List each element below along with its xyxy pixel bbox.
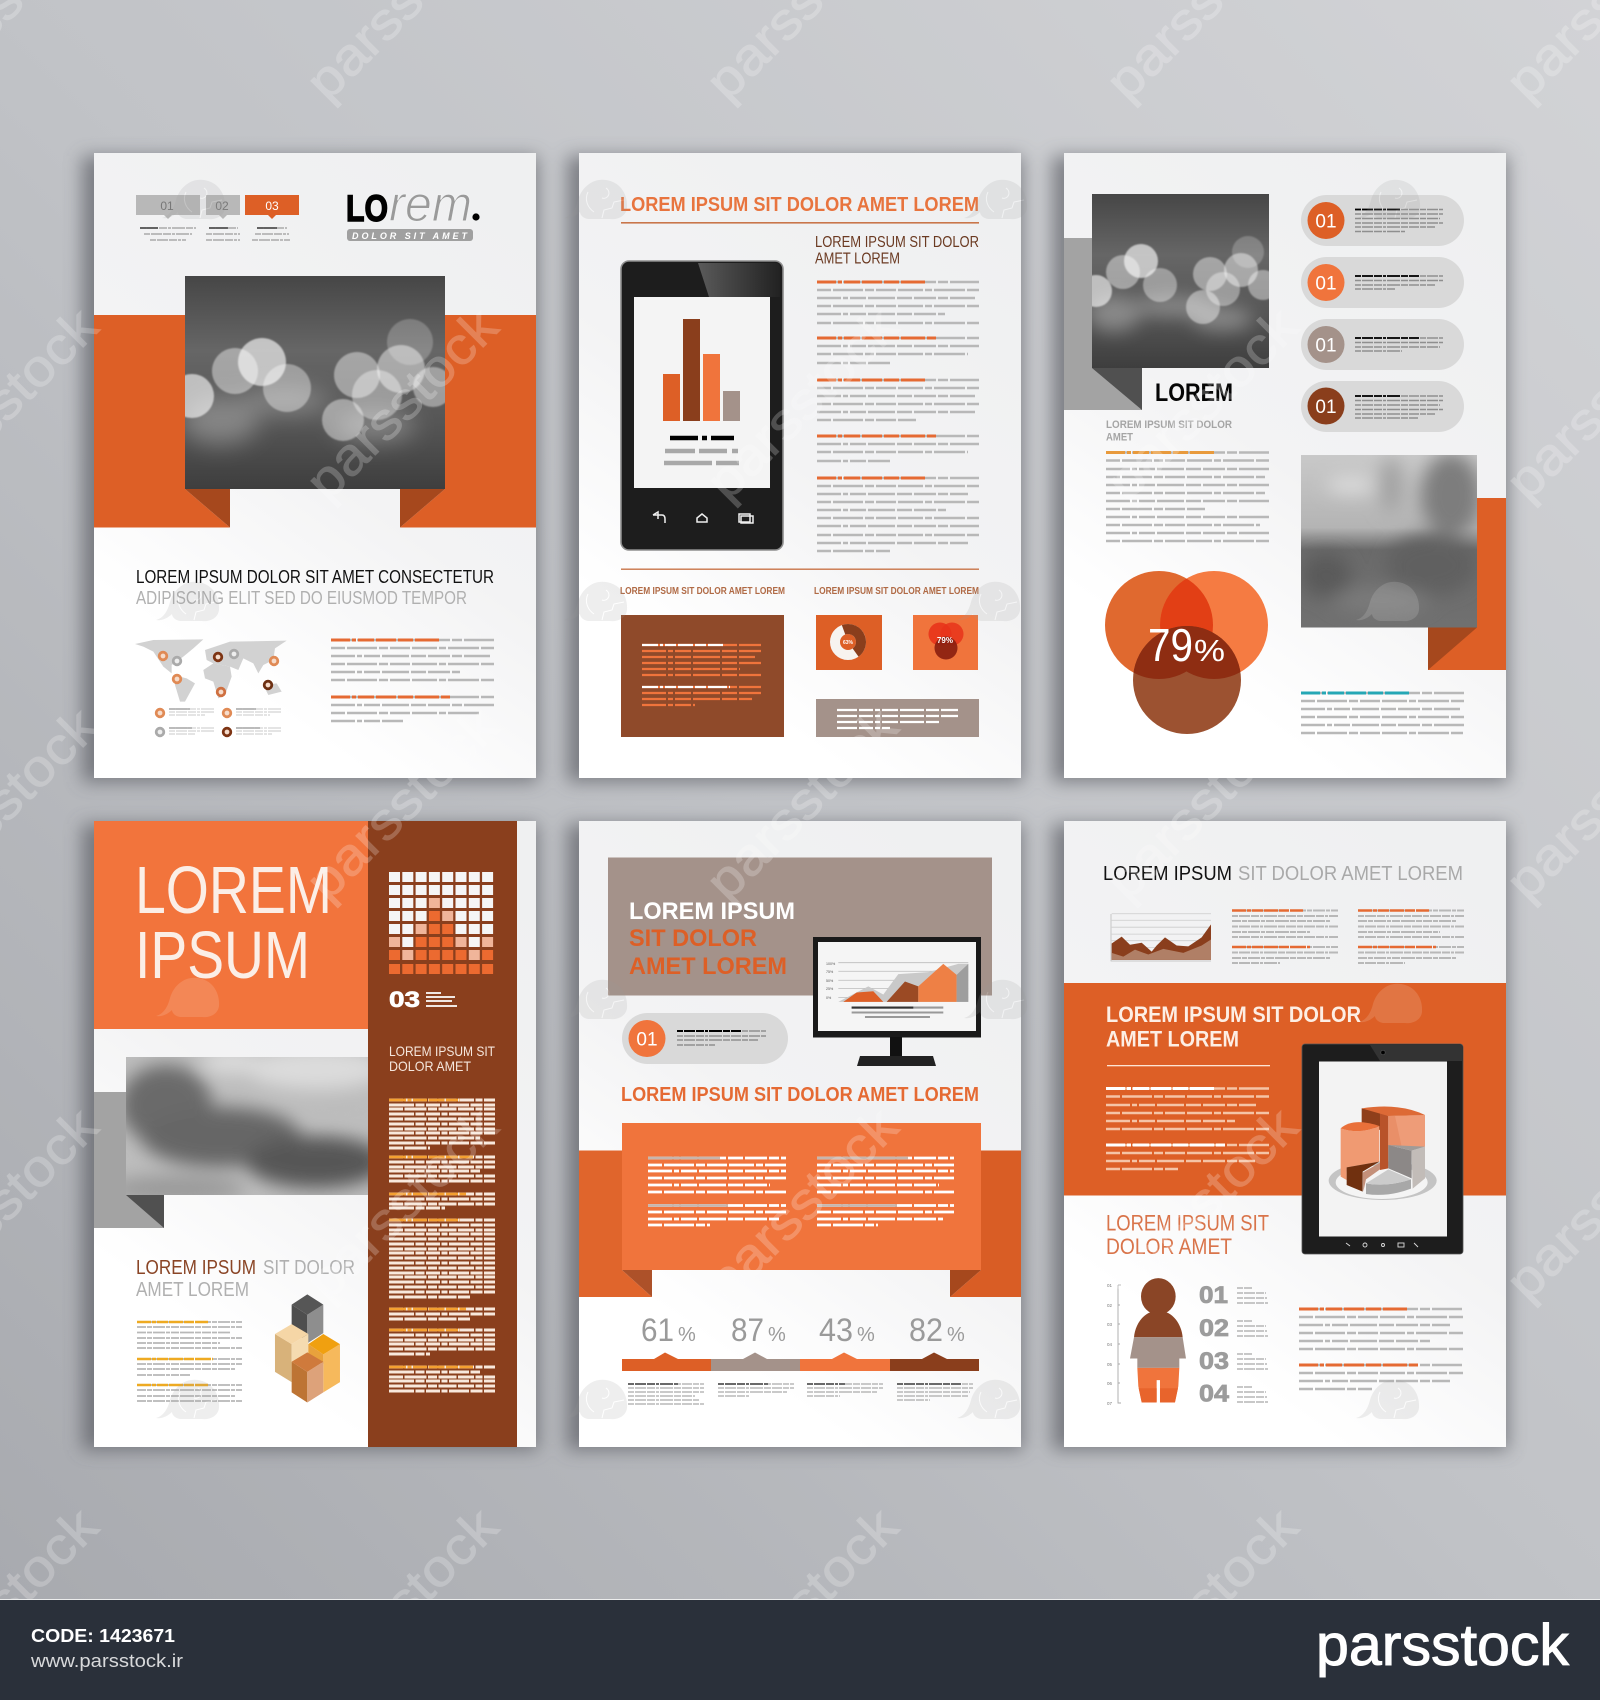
numbered pill 3: 01 — [1315, 336, 1337, 356]
parsstock diagonal watermarks: parsstock — [295, 296, 510, 511]
orange band — [1064, 983, 1506, 1196]
orange fold — [1428, 498, 1506, 670]
3D pie chart — [1329, 1107, 1437, 1200]
percentages: 43 — [819, 1312, 853, 1348]
band heading — [1106, 1002, 1361, 1052]
orange band with folds — [94, 315, 536, 528]
numbered tabs: 03 — [265, 199, 279, 213]
numbered list: 03 — [1199, 1348, 1229, 1375]
venn diagram 79% — [1105, 571, 1268, 734]
parsstock diagonal watermarks: parsstock — [695, 696, 910, 911]
grey fold — [1064, 238, 1142, 410]
brown column — [368, 821, 517, 1447]
numbered pill 1 — [1301, 195, 1464, 246]
panel: venn page — [1064, 153, 1506, 778]
figure infographic — [1107, 1278, 1186, 1406]
parsstock diagonal watermarks: parsstock — [1095, 296, 1310, 511]
heading — [1103, 863, 1463, 885]
subheading: SIT DOLOR — [263, 1257, 355, 1279]
figure infographic: 01 — [1107, 1283, 1113, 1288]
numbered pill — [622, 1013, 788, 1064]
panel: phone page — [579, 153, 1021, 778]
area chart — [1111, 914, 1211, 961]
text columns — [1232, 910, 1464, 963]
numbered tabs — [136, 195, 299, 240]
numbered pill 2 — [1301, 257, 1464, 308]
band rule — [1107, 1065, 1270, 1066]
panel: cover page — [94, 153, 536, 778]
segmented bar — [622, 1352, 979, 1371]
figure infographic: 05 — [1107, 1362, 1113, 1367]
venn tile: 79% — [937, 636, 953, 645]
blurred photo — [1301, 453, 1481, 628]
percentages: 61 — [641, 1312, 674, 1348]
teal text block — [1301, 693, 1464, 733]
heading: ADIPISCING ELIT SED DO EIUSMOD TEMPOR — [136, 588, 467, 608]
code text: CODE: 1423671 — [31, 1626, 175, 1646]
donut chart tile — [816, 615, 882, 670]
percentages: % — [947, 1324, 965, 1346]
parsstock logo: parsstock — [1316, 1613, 1570, 1678]
subheading — [815, 234, 979, 268]
subheading — [136, 1257, 355, 1301]
donut chart tile: 63% — [843, 640, 854, 646]
elephant watermark marks — [156, 180, 1420, 1419]
small headings: LOREM IPSUM SIT DOLOR AMET LOREM — [814, 585, 979, 597]
header text: SIT DOLOR — [629, 925, 757, 952]
logo: DOLOR SIT AMET — [352, 231, 468, 241]
monitor with area chart: 25% — [826, 987, 834, 991]
divider — [621, 568, 979, 570]
numbered pill 4 — [1301, 381, 1464, 432]
figure infographic: 02 — [1107, 1303, 1113, 1308]
percentages: % — [857, 1324, 875, 1346]
heading — [136, 567, 494, 608]
title rule — [621, 222, 979, 224]
parsstock diagonal watermarks: parsstock — [295, 696, 510, 911]
world map with markers — [135, 639, 287, 736]
text column — [817, 282, 979, 551]
area chart — [838, 963, 968, 1017]
title: LOREM IPSUM SIT DOLOR AMET LOREM — [620, 194, 979, 216]
percentages: % — [678, 1324, 696, 1346]
title LOREM IPSUM — [135, 853, 332, 993]
panel shadows — [82, 156, 1508, 1450]
monitor with area chart: 50% — [826, 979, 834, 983]
03 label: 03 — [389, 987, 420, 1012]
parsstock diagonal watermarks: parsstock — [1095, 1096, 1310, 1311]
numbered list: 04 — [1199, 1380, 1230, 1408]
numbered list — [1199, 1282, 1269, 1408]
figure infographic: 06 — [1107, 1381, 1113, 1386]
numbered pill 2: 01 — [1315, 274, 1337, 294]
tablet with 3D pie — [1302, 1044, 1463, 1254]
lower heading — [1106, 1210, 1269, 1259]
brown text box — [621, 615, 784, 737]
LOREM label: LOREM — [1155, 379, 1233, 407]
bokeh photo — [1080, 194, 1278, 368]
venn tile — [913, 615, 978, 670]
monitor with area chart: 75% — [826, 970, 834, 974]
parsstock diagonal watermarks: parsstock — [695, 296, 910, 511]
percentages: % — [768, 1324, 786, 1346]
heading: LOREM IPSUM — [1103, 863, 1232, 885]
figure infographic: 04 — [1107, 1342, 1113, 1347]
column heading: DOLOR AMET — [389, 1058, 471, 1074]
03 label — [389, 987, 457, 1012]
logo — [346, 176, 480, 241]
grey fold — [94, 1092, 164, 1228]
figure infographic: 07 — [1107, 1401, 1113, 1406]
panel: ribbon and stats page — [579, 821, 1021, 1447]
bokeh photo — [170, 276, 453, 489]
title: LOREM IPSUM SIT DOLOR AMET LOREM — [621, 1084, 979, 1106]
column text — [389, 1100, 495, 1391]
subheading: LOREM IPSUM SIT DOLOR — [815, 234, 979, 251]
numbered list: 02 — [1199, 1315, 1229, 1342]
numbered pill 4: 01 — [1315, 397, 1337, 418]
taupe text box — [816, 699, 979, 737]
ribbon text left — [648, 1158, 786, 1225]
percentages: 82 — [909, 1312, 943, 1348]
header text: LOREM IPSUM — [629, 898, 795, 925]
tablet nav icons — [1346, 1243, 1418, 1247]
subheading: LOREM IPSUM — [136, 1257, 256, 1279]
percentages — [641, 1312, 965, 1348]
parsstock diagonal watermarks: parsstock — [695, 1096, 910, 1311]
captions — [628, 1384, 973, 1404]
numbered pill: 01 — [636, 1030, 658, 1050]
venn diagram 79%: 79 — [1148, 619, 1193, 671]
lower heading: LOREM IPSUM SIT — [1106, 1210, 1269, 1236]
footer bar — [0, 1599, 1600, 1700]
panel: tablet page — [1064, 821, 1506, 1447]
numbered pill 1: 01 — [1315, 212, 1337, 232]
numbered tabs: 02 — [215, 199, 229, 213]
logo: rem — [389, 176, 472, 232]
small headings — [620, 585, 979, 597]
numbered pill 3 — [1301, 319, 1464, 370]
text block — [1106, 452, 1269, 541]
monitor with area chart: 100% — [826, 962, 836, 966]
small headings: LOREM IPSUM SIT DOLOR AMET LOREM — [620, 585, 785, 597]
isometric cubes — [275, 1294, 340, 1403]
ribbon — [579, 1123, 1021, 1297]
orange header — [94, 821, 368, 1029]
column heading: LOREM IPSUM SIT — [389, 1043, 495, 1059]
elephant marks on colour — [156, 582, 1422, 1023]
numbered tabs: 01 — [160, 199, 174, 213]
monitor with area chart — [813, 937, 981, 1066]
bar chart — [663, 319, 740, 421]
header text: AMET LOREM — [629, 953, 787, 980]
pixel chart grid — [389, 872, 493, 974]
column heading — [389, 1043, 495, 1074]
panel: title and brown column page — [94, 821, 536, 1447]
ribbon text right — [817, 1158, 954, 1225]
venn diagram 79%: % — [1194, 633, 1225, 668]
parsstock diagonal watermarks: parsstock — [1095, 696, 1310, 911]
subheading — [1106, 419, 1232, 444]
website: www.parsstock.ir — [30, 1651, 183, 1671]
subheading: AMET — [1106, 432, 1133, 444]
phone nav icons — [653, 512, 753, 523]
title LOREM IPSUM: LOREM — [135, 853, 332, 928]
band heading: AMET LOREM — [1106, 1026, 1239, 1052]
logo: LO — [346, 188, 388, 229]
text block — [1299, 1309, 1463, 1389]
small text block — [137, 1322, 242, 1401]
lower heading: DOLOR AMET — [1106, 1234, 1232, 1259]
subheading: AMET LOREM — [815, 250, 900, 268]
band text — [1106, 1088, 1269, 1169]
title LOREM IPSUM: IPSUM — [135, 918, 310, 993]
phone with bar chart — [621, 261, 783, 550]
percentages: 87 — [731, 1312, 764, 1348]
monitor with area chart: 0% — [826, 996, 832, 1000]
heading: SIT DOLOR AMET LOREM — [1238, 863, 1463, 885]
band heading: LOREM IPSUM SIT DOLOR — [1106, 1002, 1361, 1027]
text block — [331, 640, 494, 721]
figure infographic: 03 — [1107, 1322, 1113, 1327]
subheading: AMET LOREM — [136, 1279, 249, 1301]
subheading: LOREM IPSUM SIT DOLOR — [1106, 419, 1232, 431]
parsstock diagonal watermarks: parsstock — [295, 1096, 510, 1311]
numbered list: 01 — [1199, 1282, 1228, 1309]
taupe header — [608, 858, 992, 996]
heading: LOREM IPSUM DOLOR SIT AMET CONSECTETUR — [136, 567, 494, 587]
header text — [629, 898, 795, 980]
blurred photo — [106, 1049, 386, 1203]
